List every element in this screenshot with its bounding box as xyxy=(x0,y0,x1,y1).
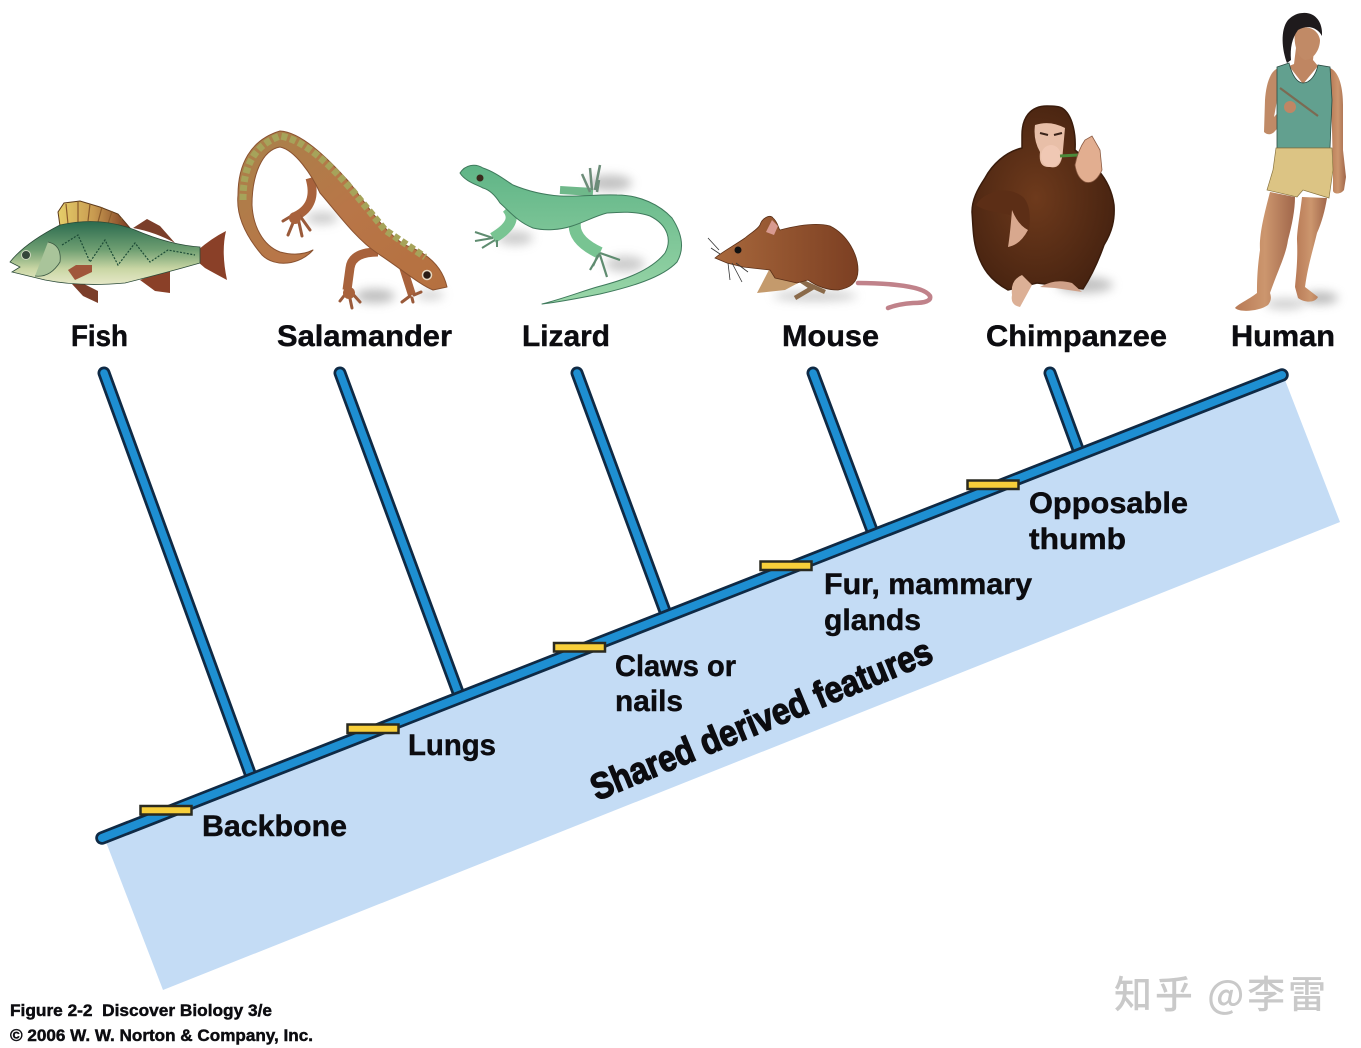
label: Fur, mammary glands: Fur, mammary xyxy=(824,568,1032,601)
branch: chimpanzee xyxy=(1050,373,1079,452)
label: Lungs: Lungs xyxy=(408,729,496,762)
marker: backbone xyxy=(140,806,192,814)
marker: lungs xyxy=(348,724,398,733)
label: Claws or nails: Claws or xyxy=(615,650,736,683)
marker: opposable thumb xyxy=(968,480,1018,489)
caption: figure credit: Figure 2-2 Discover Biology 3/e xyxy=(10,1002,272,1020)
icon: lizard xyxy=(460,165,681,304)
label: Fur, mammary glands: glands xyxy=(824,604,921,637)
branch: salamander xyxy=(340,373,459,695)
caption: figure credit: © 2006 W. W. Norton & Company, Inc. xyxy=(10,1027,313,1045)
trunk xyxy=(102,375,1282,838)
name: Human: Human xyxy=(1231,320,1335,353)
label: Fur, mammary glands xyxy=(824,568,1032,637)
label: Shared derived features: Shared derived features xyxy=(584,630,938,808)
branch: lizard xyxy=(577,373,666,614)
name: Lizard: Lizard xyxy=(522,320,610,353)
icon: salamander xyxy=(238,131,447,308)
label: Opposable thumb: Opposable xyxy=(1029,487,1188,520)
icon: mouse xyxy=(708,216,930,308)
name: Salamander: Salamander xyxy=(277,320,452,353)
branch: fish inner xyxy=(104,373,251,776)
label: Opposable thumb: thumb xyxy=(1029,523,1126,556)
name: Chimpanzee: Chimpanzee xyxy=(986,320,1167,353)
marker: fur, mammary glands xyxy=(760,562,812,570)
branch: mouse inner xyxy=(813,373,873,533)
branch: chimpanzee inner xyxy=(1050,373,1079,452)
label: Opposable thumb xyxy=(1029,487,1188,556)
branch: mouse xyxy=(813,373,873,533)
branch: salamander inner xyxy=(340,373,459,695)
icon: chimpanzee xyxy=(972,106,1114,307)
name: Mouse: Mouse xyxy=(782,320,879,353)
name: Fish: Fish xyxy=(71,320,128,353)
watermark: 知乎 @李雷 xyxy=(1114,964,1326,1019)
icon: human xyxy=(1235,13,1346,311)
trunk outline xyxy=(102,375,1282,838)
branch: lizard inner xyxy=(577,373,666,614)
label: Claws or nails xyxy=(615,650,736,718)
label: Claws or nails: nails xyxy=(615,685,683,718)
marker: claws or nails xyxy=(554,643,605,652)
panel: shared derived features band xyxy=(106,380,1340,990)
caption: figure credit xyxy=(10,1002,313,1045)
branch: fish xyxy=(104,373,251,776)
icon: fish xyxy=(10,201,227,303)
label: Backbone: Backbone xyxy=(202,810,347,843)
